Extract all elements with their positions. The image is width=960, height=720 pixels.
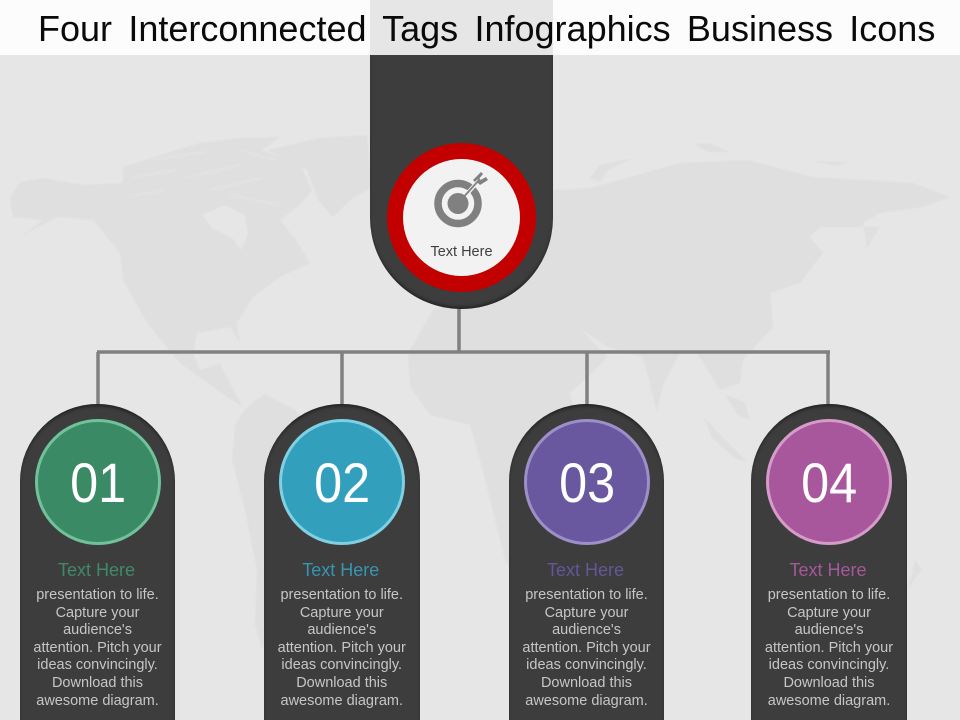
body text 04 xyxy=(765,587,893,709)
body text 03: attention. Pitch your xyxy=(522,640,651,656)
body text 03: audience's xyxy=(552,622,621,638)
number circle 04 xyxy=(766,419,892,545)
body text 02 xyxy=(278,587,406,709)
body text 02: awesome diagram. xyxy=(280,693,403,709)
body text 01: Download this xyxy=(52,675,143,691)
number circle 03: 03 xyxy=(559,451,615,514)
body text 04: audience's xyxy=(795,622,863,638)
body text 04: presentation to life. xyxy=(768,587,890,603)
body text 02: attention. Pitch your xyxy=(278,640,406,656)
body text 01: ideas convincingly. xyxy=(37,657,158,673)
title: Four Interconnected Tags Infographics Business Icons xyxy=(38,8,935,49)
body text 01: Capture your xyxy=(56,605,139,621)
body text 01: audience's xyxy=(63,622,132,638)
body text 04: attention. Pitch your xyxy=(765,640,893,656)
body text 02: presentation to life. xyxy=(280,587,403,603)
body text 04: Capture your xyxy=(787,605,871,621)
number circle 03 xyxy=(524,419,650,545)
body text 02: audience's xyxy=(307,622,376,638)
heading 02: Text Here xyxy=(302,560,379,580)
number circle 04: 04 xyxy=(801,451,857,514)
badge label: Text Here xyxy=(430,244,493,260)
body text 01 xyxy=(33,587,162,709)
title band right xyxy=(553,0,960,55)
title band left xyxy=(0,0,370,55)
number circle 01 xyxy=(35,419,161,545)
body text 03: awesome diagram. xyxy=(525,693,648,709)
body text 04: awesome diagram. xyxy=(768,693,890,709)
body text 04: Download this xyxy=(783,675,875,691)
tag 03 xyxy=(509,404,664,720)
tag 01 xyxy=(20,404,175,720)
number circle 01: 01 xyxy=(70,451,126,514)
heading 03: Text Here xyxy=(547,560,624,580)
body text 04: ideas convincingly. xyxy=(769,657,889,673)
heading 04: Text Here xyxy=(789,560,867,580)
tag 02 xyxy=(264,404,420,720)
number circle 02 xyxy=(279,419,405,545)
body text 03: Download this xyxy=(541,675,632,691)
body text 01: attention. Pitch your xyxy=(33,640,162,656)
white inner circle xyxy=(403,159,520,276)
body text 03: Capture your xyxy=(545,605,628,621)
body text 01: awesome diagram. xyxy=(36,693,159,709)
body text 03: presentation to life. xyxy=(525,587,648,603)
body text 01: presentation to life. xyxy=(36,587,159,603)
icon: target with arrow xyxy=(434,172,488,228)
red ring badge xyxy=(387,143,536,292)
body text 03: ideas convincingly. xyxy=(526,657,647,673)
number circle 02: 02 xyxy=(314,451,370,514)
body text 03 xyxy=(522,587,651,709)
body text 02: Capture your xyxy=(300,605,384,621)
heading 01: Text Here xyxy=(58,560,135,580)
top tag xyxy=(370,55,553,309)
body text 02: ideas convincingly. xyxy=(281,657,402,673)
body text 02: Download this xyxy=(296,675,387,691)
tag 04 xyxy=(751,404,907,720)
